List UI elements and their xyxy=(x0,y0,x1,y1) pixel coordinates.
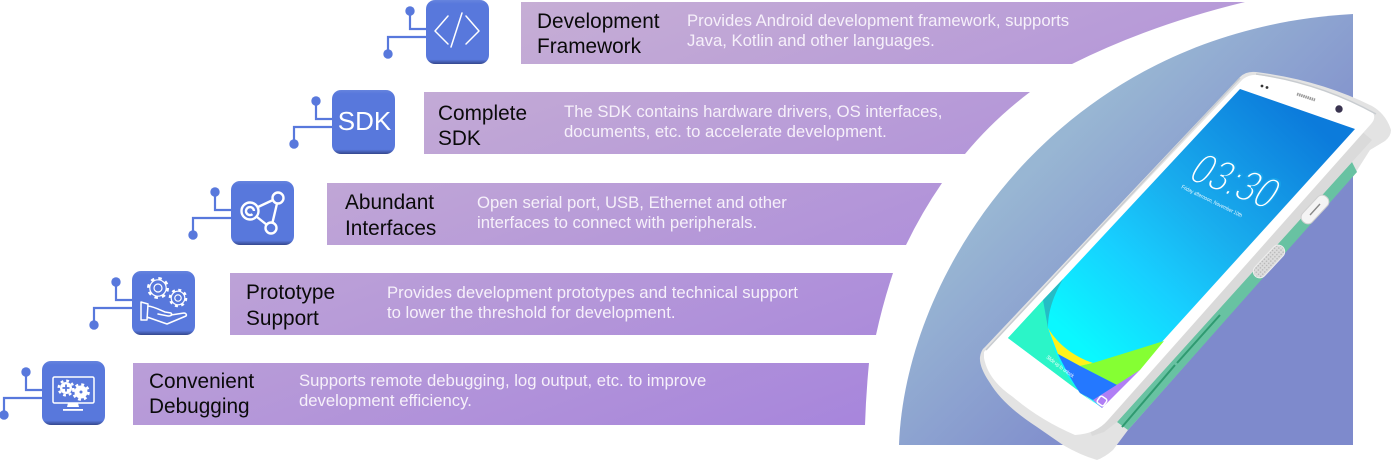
description: Java, Kotlin and other languages. xyxy=(687,31,935,50)
heading: Abundant xyxy=(345,191,434,214)
front face xyxy=(984,75,1374,435)
background arc panel xyxy=(899,14,1353,445)
icon: network xyxy=(231,181,294,245)
heading: SDK xyxy=(438,127,481,150)
description: Supports remote debugging, log output, etc. to improve xyxy=(299,371,706,390)
description: Provides development prototypes and technical support xyxy=(387,283,798,302)
icon: gears on hand xyxy=(132,271,195,335)
row: Prototype Support xyxy=(89,271,893,335)
row: Complete SDK xyxy=(289,90,1030,154)
icon: code xyxy=(426,0,489,64)
phone body xyxy=(980,72,1391,460)
scan button xyxy=(1251,242,1287,281)
icon: monitor with gears xyxy=(42,361,105,425)
wallpaper shapes xyxy=(1008,279,1164,408)
clock: 03:30 xyxy=(1180,144,1291,218)
row: Convenient Debugging xyxy=(0,361,869,425)
connector lines xyxy=(383,6,426,59)
connector lines xyxy=(0,367,42,420)
volume button xyxy=(1299,193,1331,226)
icon: SDK xyxy=(332,90,395,154)
description: The SDK contains hardware drivers, OS interfaces, xyxy=(564,102,942,121)
side rail slots xyxy=(1122,315,1220,427)
heading: Convenient xyxy=(149,370,254,393)
description: development efficiency. xyxy=(299,391,472,410)
phone xyxy=(980,72,1391,460)
description: documents, etc. to accelerate development. xyxy=(564,122,887,141)
banner xyxy=(424,92,1030,154)
unlock hint: Slide up to unlock xyxy=(1045,355,1075,380)
heading: Development xyxy=(537,10,660,33)
description: Open serial port, USB, Ethernet and other xyxy=(477,193,787,212)
banner xyxy=(521,2,1245,64)
home icon xyxy=(1096,395,1108,407)
icon: SDK: SDK xyxy=(338,106,392,136)
description: to lower the threshold for development. xyxy=(387,303,676,322)
green side strip xyxy=(1117,162,1357,430)
row: Abundant Interfaces xyxy=(188,181,942,245)
connector lines xyxy=(289,96,332,149)
connector lines xyxy=(89,277,132,330)
grey side band xyxy=(1090,130,1372,436)
heading: Framework xyxy=(537,35,642,58)
heading: Prototype xyxy=(246,281,335,304)
description: Provides Android development framework, supports xyxy=(687,11,1069,30)
banner xyxy=(327,183,942,245)
screen xyxy=(1008,89,1355,408)
banner xyxy=(133,363,869,425)
heading: Support xyxy=(246,307,319,330)
banner xyxy=(230,273,893,335)
speaker and sensors xyxy=(1261,85,1343,113)
date: Friday afternoon, November 10th xyxy=(1180,184,1243,219)
heading: Complete xyxy=(438,102,527,125)
heading: Interfaces xyxy=(345,217,436,240)
connector lines xyxy=(188,187,231,240)
description: interfaces to connect with peripherals. xyxy=(477,213,757,232)
heading: Debugging xyxy=(149,395,250,418)
row: Development Framework xyxy=(383,0,1245,64)
top edge highlight xyxy=(986,74,1376,350)
